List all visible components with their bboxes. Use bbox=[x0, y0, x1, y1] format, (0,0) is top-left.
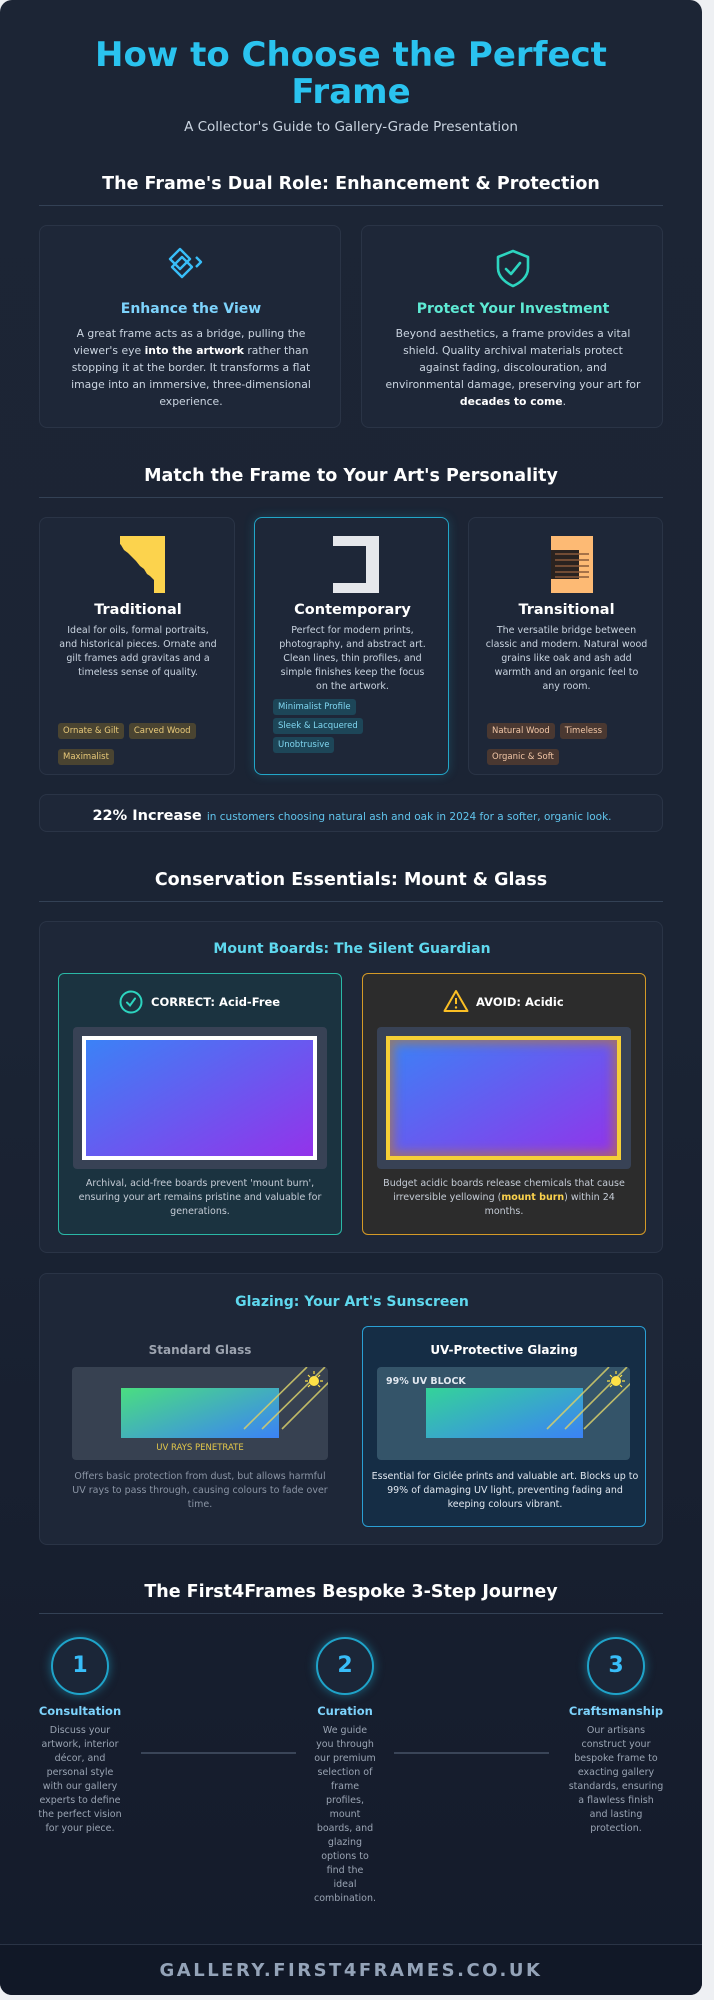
title bbox=[95, 35, 607, 112]
icon: number circle bbox=[316, 1637, 374, 1695]
heading: Protect Your Investment bbox=[417, 301, 609, 317]
tags: Maximalist bbox=[63, 752, 109, 762]
heading: journey: The First4Frames Bespoke 3-Step Journey bbox=[144, 1582, 558, 1602]
text: A great frame acts as a bridge, pulling the viewer's eye into the artwork rather than stopping it at the border. It transforms a flat image into an immersive, three-dimensional experience. bbox=[71, 327, 311, 408]
text: Offers basic protection from dust, but allows harmful UV rays to pass through, causing colours to fade over time. bbox=[72, 1471, 328, 1510]
illustration bbox=[73, 1027, 327, 1169]
panel: traditional bbox=[39, 517, 235, 775]
text: Essential for Giclée prints and valuable art. Blocks up to 99% of damaging UV light, preventing fading and keeping colours vibrant. bbox=[372, 1471, 638, 1510]
tags: Unobtrusive bbox=[278, 740, 329, 750]
card: uv glazing: UV-Protective Glazing bbox=[430, 1343, 578, 1357]
text: Ideal for oils, formal portraits, and historical pieces. Ornate and gilt frames add gravitas and a timeless sense of quality. bbox=[59, 625, 217, 678]
label: CORRECT: Acid-Free bbox=[151, 995, 280, 1009]
heading: personality: Match the Frame to Your Art's Personality bbox=[144, 466, 558, 486]
tags bbox=[273, 699, 363, 753]
panel: transitional bbox=[468, 517, 663, 775]
step 1 bbox=[38, 1631, 122, 1834]
icon: warning bbox=[444, 990, 468, 1012]
footer bbox=[0, 1944, 702, 1995]
tags bbox=[487, 723, 607, 765]
heading: Contemporary bbox=[294, 602, 411, 618]
icon: check circle bbox=[120, 990, 142, 1014]
card: standard glass bbox=[72, 1343, 328, 1510]
heading: dual role: The Frame's Dual Role: Enhancement & Protection bbox=[102, 174, 600, 194]
icon: thin profile bbox=[333, 536, 379, 593]
card: acidic bbox=[362, 973, 646, 1235]
step 2: Curation bbox=[317, 1704, 373, 1718]
step 2 bbox=[310, 1631, 380, 1904]
icon: wood profile bbox=[551, 536, 593, 593]
text: Beyond aesthetics, a frame provides a vital shield. Quality archival materials protect against fading, discolouration, and environmental damage, preserving your art for decades to come. bbox=[386, 327, 640, 408]
text: Archival, acid-free boards prevent 'mount burn', ensuring your art remains pristine and valuable for generations. bbox=[79, 1178, 321, 1217]
panel: glazing bbox=[39, 1273, 663, 1545]
subtitle: A Collector's Guide to Gallery-Grade Presentation bbox=[184, 119, 518, 135]
step 2: We guide you through our premium selection of frame profiles, mount boards, and glazing options to find the ideal combination. bbox=[314, 1725, 376, 1904]
heading: Transitional bbox=[518, 602, 615, 618]
illustration: uv penetrate bbox=[72, 1367, 328, 1460]
heading: Enhance the View bbox=[121, 301, 261, 317]
card: acid-free bbox=[58, 973, 342, 1235]
illustration: uv block bbox=[377, 1367, 630, 1460]
illustration: uv penetrate: UV RAYS PENETRATE bbox=[156, 1443, 244, 1453]
heading: conservation: Conservation Essentials: Mount & Glass bbox=[155, 870, 547, 890]
title: How to Choose the Perfect bbox=[95, 35, 607, 75]
callout: stat: 22% Increase in customers choosing natural ash and oak in 2024 for a softer, organic look. bbox=[92, 808, 612, 824]
illustration bbox=[377, 1027, 631, 1169]
step 3 bbox=[569, 1631, 663, 1834]
subheading: Mount Boards: The Silent Guardian bbox=[213, 941, 491, 957]
step 3: Craftsmanship bbox=[569, 1704, 663, 1718]
tags: Natural Wood bbox=[492, 726, 550, 736]
icon: layered diamonds bbox=[168, 248, 202, 278]
icon: ornate profile bbox=[120, 536, 165, 593]
icon: number circle bbox=[587, 1637, 645, 1695]
footer: GALLERY.FIRST4FRAMES.CO.UK bbox=[160, 1960, 542, 1981]
panel: mount boards bbox=[39, 921, 663, 1253]
icon: number circle: 3 bbox=[608, 1653, 624, 1678]
step 3: Our artisans construct your bespoke frame to exacting gallery standards, ensuring a flawless finish and lasting protection. bbox=[569, 1725, 663, 1834]
card: standard glass: Standard Glass bbox=[149, 1343, 251, 1357]
tags: Minimalist Profile bbox=[278, 702, 351, 712]
step 1: Consultation bbox=[39, 1704, 121, 1718]
tags: Timeless bbox=[565, 726, 602, 736]
panel: protect bbox=[361, 225, 663, 428]
panel: contemporary bbox=[254, 517, 449, 775]
card: uv glazing bbox=[362, 1326, 646, 1527]
tags: Organic & Soft bbox=[492, 752, 554, 762]
step 1: Discuss your artwork, interior décor, and personal style with our gallery experts to define the perfect vision for your piece. bbox=[38, 1725, 122, 1834]
heading: Traditional bbox=[94, 602, 182, 618]
panel: enhance bbox=[39, 225, 341, 428]
tags: Ornate & Gilt bbox=[63, 726, 119, 736]
text: The versatile bridge between classic and modern. Natural wood grains like oak and ash add warmth and an organic feel to any room. bbox=[486, 625, 647, 692]
icon: number circle: 2 bbox=[337, 1653, 353, 1678]
callout: stat bbox=[39, 794, 663, 832]
illustration: uv block: 99% UV BLOCK bbox=[386, 1376, 466, 1387]
tags bbox=[58, 723, 196, 765]
icon: number circle bbox=[51, 1637, 109, 1695]
tags: Carved Wood bbox=[134, 726, 191, 736]
title: Frame bbox=[291, 72, 411, 112]
subheading: Glazing: Your Art's Sunscreen bbox=[235, 1294, 469, 1310]
icon: shield bbox=[496, 250, 530, 288]
text: Budget acidic boards release chemicals that cause irreversible yellowing (mount burn) within 24 months. bbox=[383, 1178, 625, 1217]
label: AVOID: Acidic bbox=[476, 995, 564, 1009]
connector arrows bbox=[141, 1752, 296, 1754]
text: Perfect for modern prints, photography, and abstract art. Clean lines, thin profiles, and simple finishes keep the focus on the artwork. bbox=[279, 625, 426, 692]
tags: Sleek & Lacquered bbox=[278, 721, 358, 731]
icon: number circle: 1 bbox=[72, 1653, 88, 1678]
